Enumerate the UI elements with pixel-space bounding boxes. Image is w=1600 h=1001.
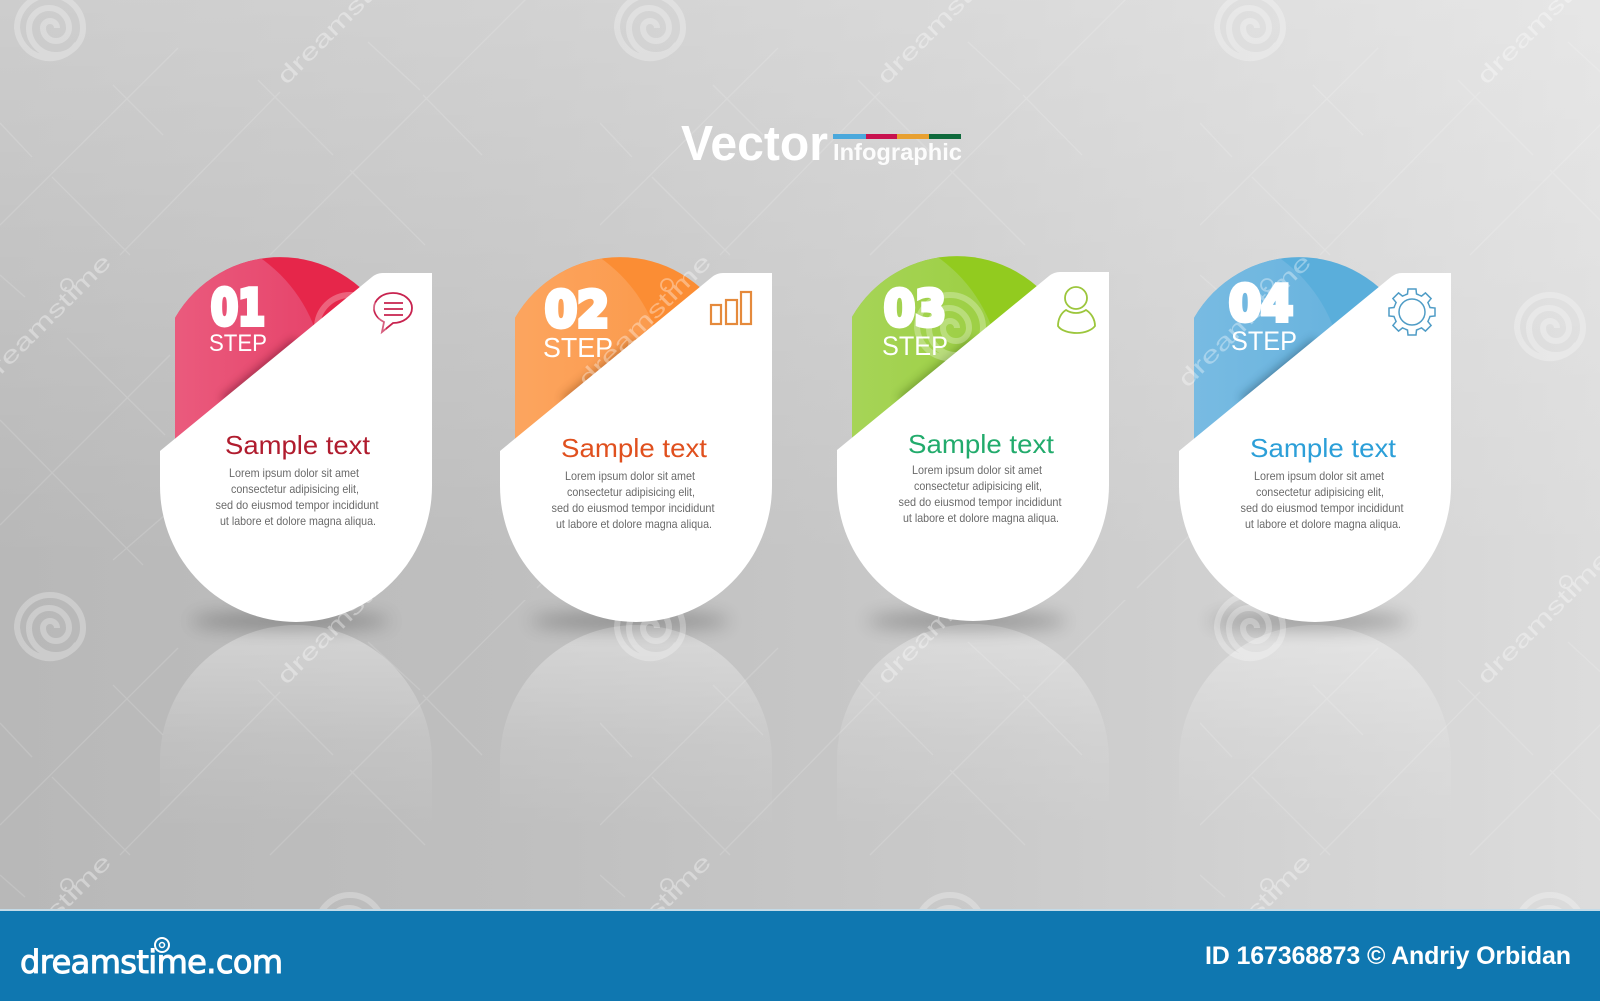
icon: speech bubble <box>374 293 412 332</box>
number: 02 <box>545 282 609 338</box>
body text: consectetur adipisicing elit, <box>914 479 1042 493</box>
step label: STEP <box>543 332 613 363</box>
heading: Sample text <box>908 429 1055 459</box>
body text <box>216 466 379 528</box>
shadow <box>190 613 390 629</box>
white card <box>500 273 772 622</box>
body text: sed do eiusmod tempor incididunt <box>1240 501 1404 515</box>
card 3: step 03 <box>837 256 1109 714</box>
footer logo: dreamstime.com <box>20 943 283 981</box>
reflection <box>160 625 432 830</box>
shadow <box>530 613 730 629</box>
body text: Lorem ipsum dolor sit amet <box>912 463 1043 477</box>
body text <box>898 463 1062 525</box>
colored tab <box>515 257 700 438</box>
body text: consectetur adipisicing elit, <box>231 482 359 496</box>
body text <box>1240 469 1404 531</box>
body text <box>552 469 715 531</box>
body text: sed do eiusmod tempor incididunt <box>898 495 1062 509</box>
heading: Sample text <box>1250 433 1397 463</box>
reflection <box>1179 625 1451 830</box>
heading: Sample text <box>561 433 708 463</box>
step label: STEP <box>882 331 948 361</box>
body text: Lorem ipsum dolor sit amet <box>565 469 696 483</box>
colored tab <box>1194 257 1379 438</box>
reflection <box>500 625 772 830</box>
number: 01 <box>211 280 265 336</box>
body text: consectetur adipisicing elit, <box>1256 485 1384 499</box>
color bar <box>833 134 961 139</box>
body text: sed do eiusmod tempor incididunt <box>216 498 379 512</box>
number: 03 <box>884 280 946 338</box>
footer band <box>0 909 1600 1001</box>
icon: bar chart <box>711 292 751 324</box>
title word Vector: Vector <box>681 117 828 171</box>
body text: ut labore et dolore magna aliqua. <box>1245 517 1401 531</box>
heading: Sample text <box>225 430 371 460</box>
body text: sed do eiusmod tempor incididunt <box>552 501 715 515</box>
colored tab <box>852 256 1037 438</box>
white card <box>160 273 432 622</box>
card 4: step 04 <box>1179 257 1451 702</box>
body text: Lorem ipsum dolor sit amet <box>229 466 360 480</box>
body text: ut labore et dolore magna aliqua. <box>903 511 1059 525</box>
step label: STEP <box>1231 326 1297 356</box>
reflection <box>837 624 1109 829</box>
card 1: step 01 <box>160 257 432 727</box>
body text: ut labore et dolore magna aliqua. <box>220 514 376 528</box>
step label: STEP <box>209 330 267 357</box>
card 2: step 02 <box>500 257 772 724</box>
footer credit: ID 167368873 © Andriy Orbidan <box>1205 942 1571 970</box>
number: 04 <box>1229 276 1293 332</box>
title <box>681 117 962 171</box>
icon: person <box>1058 287 1095 333</box>
white card <box>837 272 1109 621</box>
icon: gear <box>1389 289 1435 335</box>
shadow <box>1209 613 1409 629</box>
white card <box>1179 273 1451 622</box>
body text: ut labore et dolore magna aliqua. <box>556 517 712 531</box>
body text: consectetur adipisicing elit, <box>567 485 695 499</box>
body text: Lorem ipsum dolor sit amet <box>1254 469 1385 483</box>
colored tab <box>175 257 360 438</box>
shadow <box>867 613 1067 629</box>
title word Infographic: Infographic <box>833 139 962 165</box>
background top highlight <box>0 0 1600 560</box>
